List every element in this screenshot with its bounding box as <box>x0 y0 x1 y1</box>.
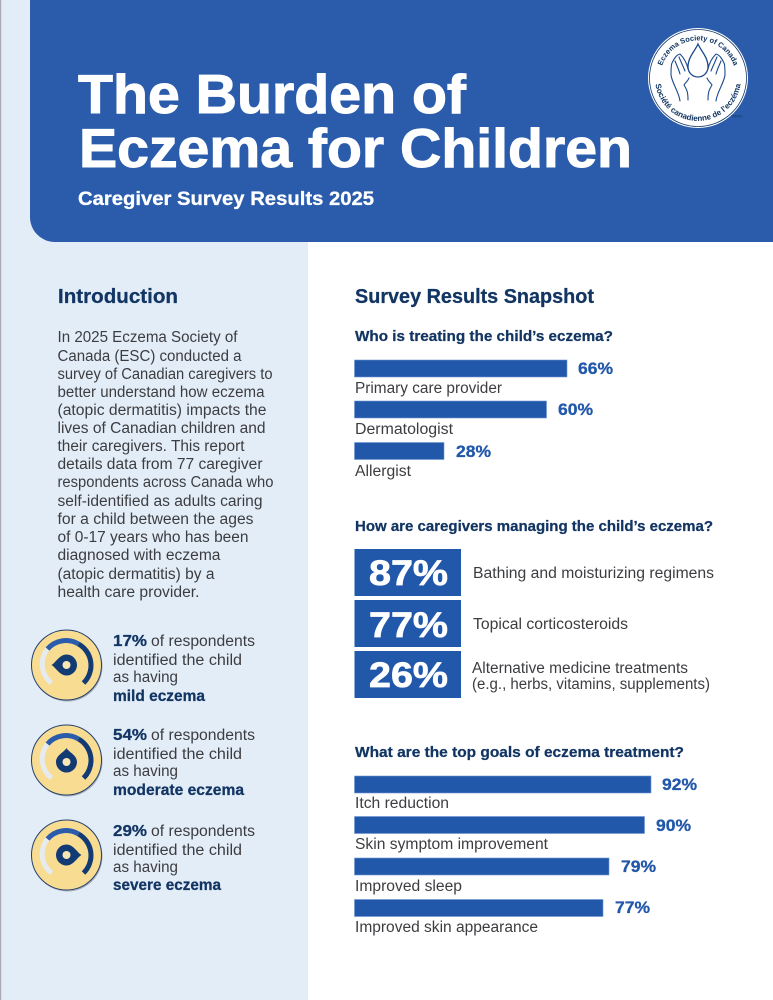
title: The Burden of <box>78 63 467 125</box>
logo: Eczema Society of Canada: TM/MC <box>731 114 743 118</box>
bar: skin symptom improvement: 90% <box>656 817 691 835</box>
bar: itch reduction: Itch reduction <box>355 795 449 812</box>
logo: Eczema Society of Canada: Eczema Society of Canada <box>658 35 737 66</box>
bar: itch reduction <box>354 776 697 812</box>
intro paragraph: (atopic dermatitis) impacts the <box>58 402 266 419</box>
stat box: alternative medicine: (e.g., herbs, vitamins, supplements) <box>472 676 710 693</box>
moderate text: of respondents <box>151 727 255 744</box>
question heading: Who is treating the child’s eczema? <box>355 328 613 345</box>
bar: primary care provider: Primary care provider <box>355 380 502 397</box>
heading: Introduction: Introduction <box>58 286 178 308</box>
intro paragraph: In 2025 Eczema Society of <box>58 329 238 346</box>
bar: skin symptom improvement <box>354 816 691 853</box>
mild text: of respondents <box>151 633 255 650</box>
stat box: bathing <box>354 549 714 596</box>
subtitle: Caregiver Survey Results 2025 <box>78 189 374 210</box>
stat box: alternative medicine: Alternative medicine treatments <box>472 660 688 677</box>
stat: mild eczema <box>32 630 259 705</box>
mild text: as having <box>113 669 178 686</box>
bar: improved skin appearance: Improved skin appearance <box>355 919 538 936</box>
intro paragraph: details data from 77 caregiver <box>58 456 262 473</box>
stat box: bathing: 87% <box>369 554 448 593</box>
intro paragraph: diagnosed with eczema <box>58 547 221 564</box>
severe text: identified the child <box>113 842 242 859</box>
intro paragraph: (atopic dermatitis) by a <box>58 566 215 583</box>
mild text: identified the child <box>113 652 242 669</box>
bar: improved skin appearance: 77% <box>615 899 650 917</box>
severe text: severe eczema <box>113 877 221 894</box>
bar: improved sleep: Improved sleep <box>355 878 462 895</box>
intro paragraph: respondents across Canada who <box>58 474 274 491</box>
section: who is treating <box>354 328 613 480</box>
icon: mild gauge <box>32 630 102 702</box>
bar: dermatologist: 60% <box>558 401 593 419</box>
moderate text: 54% <box>113 727 147 744</box>
mild text: mild eczema <box>113 688 205 705</box>
bar: improved sleep: 79% <box>621 858 656 876</box>
section: top goals <box>354 744 697 936</box>
bar: allergist: 28% <box>456 443 491 461</box>
moderate text: as having <box>113 763 178 780</box>
intro paragraph: self-identified as adults caring <box>58 493 262 510</box>
stat box: alternative medicine <box>354 651 710 698</box>
intro paragraph: Canada (ESC) conducted a <box>58 348 242 365</box>
bar: itch reduction: 92% <box>662 776 697 794</box>
moderate text: moderate eczema <box>113 782 244 799</box>
intro paragraph: of 0-17 years who has been <box>58 529 248 546</box>
section: how managing <box>354 518 714 698</box>
title: Eczema for Children <box>79 117 632 179</box>
severe text: of respondents <box>151 823 255 840</box>
icon: moderate gauge <box>32 725 102 796</box>
bar: allergist: Allergist <box>355 463 412 480</box>
mild text: 17% <box>113 633 147 650</box>
stat box: corticosteroids <box>354 600 628 647</box>
title <box>78 63 632 179</box>
bar: primary care provider <box>354 360 613 397</box>
header banner <box>30 0 773 242</box>
logo: Eczema Society of Canada <box>648 28 748 128</box>
intro paragraph: better understand how eczema <box>58 384 265 401</box>
stat box: corticosteroids: 77% <box>369 606 448 645</box>
stat: severe eczema <box>32 820 259 894</box>
bar: allergist <box>354 442 491 480</box>
bar: improved sleep <box>354 858 656 895</box>
bar: dermatologist <box>354 401 593 438</box>
bar: skin symptom improvement: Skin symptom improvement <box>355 836 549 853</box>
moderate text: identified the child <box>113 746 242 763</box>
intro paragraph: survey of Canadian caregivers to <box>58 366 272 383</box>
intro paragraph: lives of Canadian children and <box>58 420 266 437</box>
intro paragraph: their caregivers. This report <box>58 438 245 455</box>
stat: moderate eczema <box>32 725 259 799</box>
panel: left introduction background <box>0 0 308 1000</box>
stat box: bathing: Bathing and moisturizing regimens <box>473 565 714 582</box>
question heading: What are the top goals of eczema treatment? <box>355 744 684 761</box>
stat box: alternative medicine: 26% <box>369 656 448 695</box>
bar: dermatologist: Dermatologist <box>355 421 454 438</box>
logo: Eczema Society of Canada: Société canadienne de l’eczéma <box>656 84 741 121</box>
heading: Survey Results Snapshot: Survey Results Snapshot <box>355 286 594 308</box>
intro paragraph: for a child between the ages <box>58 511 254 528</box>
bar: improved skin appearance <box>354 899 650 936</box>
question heading: How are caregivers managing the child’s eczema? <box>355 518 713 535</box>
severe text: as having <box>113 859 178 876</box>
intro paragraph: health care provider. <box>58 584 200 601</box>
icon: severe gauge <box>32 820 102 892</box>
severe text: 29% <box>113 823 147 840</box>
bar: primary care provider: 66% <box>578 360 613 378</box>
stat box: corticosteroids: Topical corticosteroids <box>473 616 628 633</box>
